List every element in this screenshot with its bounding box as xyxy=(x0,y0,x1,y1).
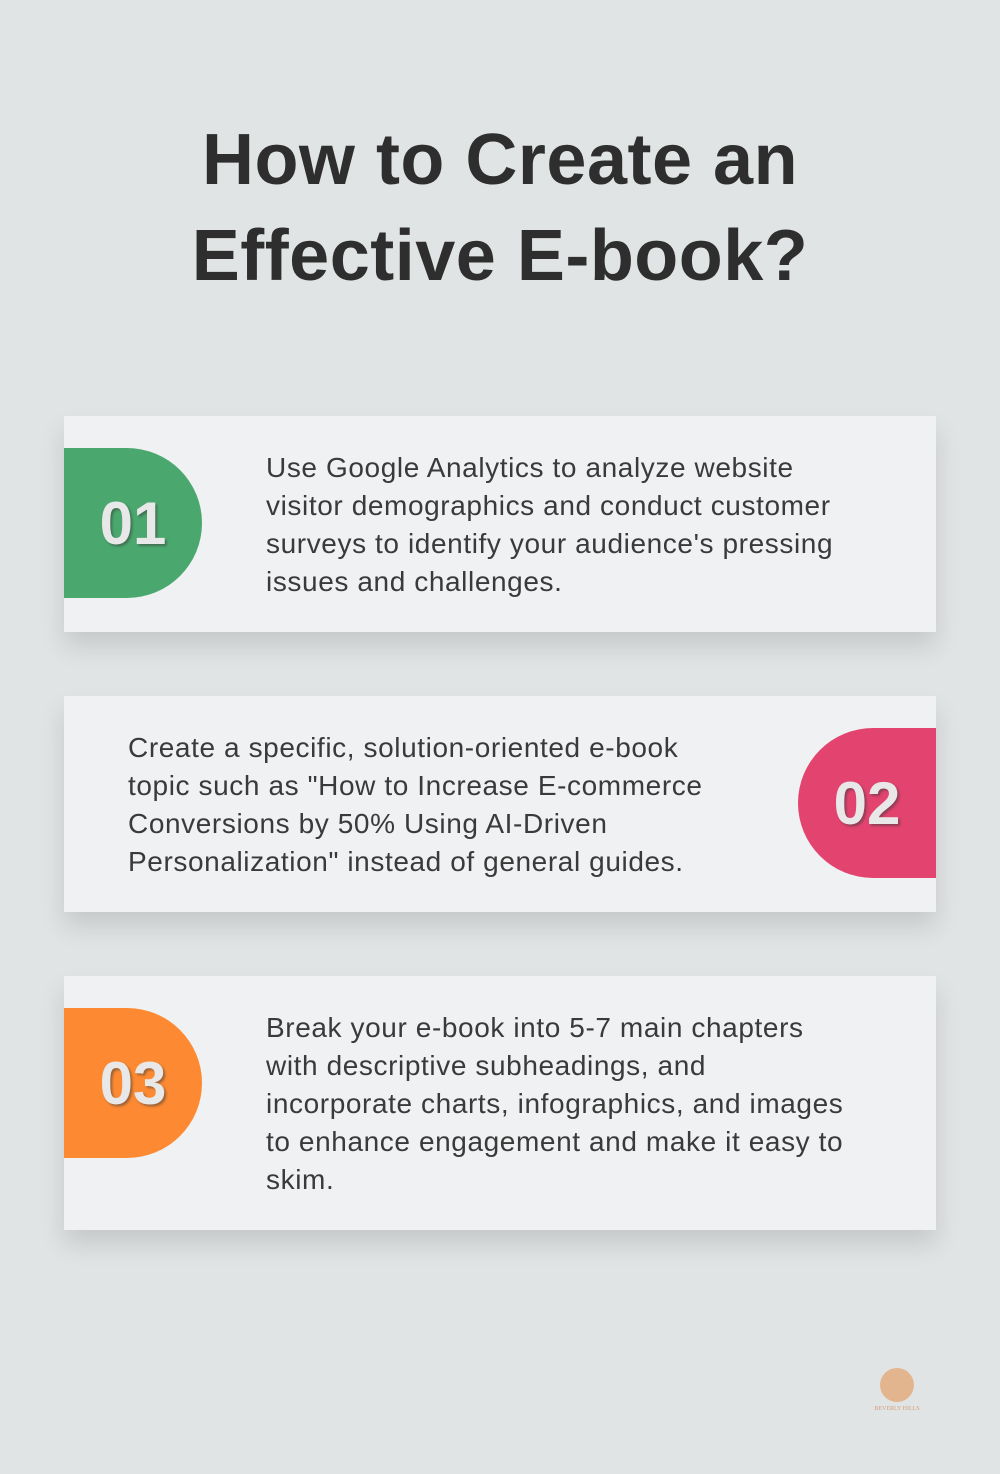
text step 2: Personalization" instead of general guides. xyxy=(128,846,684,877)
panel: step 3 xyxy=(64,976,936,1230)
badge 02: 02 xyxy=(834,770,900,836)
text step 2: Conversions by 50% Using AI-Driven xyxy=(128,808,608,839)
text step 1: surveys to identify your audience's pressing xyxy=(266,528,833,559)
logo text: BEVERLY HILLS xyxy=(874,1406,920,1412)
text step 2 xyxy=(128,732,703,877)
text step 3: incorporate charts, infographics, and images xyxy=(266,1088,843,1119)
logo xyxy=(874,1368,920,1412)
title: How to Create an xyxy=(202,120,798,200)
badge 01: 01 xyxy=(100,490,166,556)
badge 01 xyxy=(64,448,202,598)
text step 3: skim. xyxy=(266,1164,334,1195)
text step 1: Use Google Analytics to analyze website xyxy=(266,452,794,483)
text step 3: Break your e-book into 5-7 main chapters xyxy=(266,1012,804,1043)
icon: logo circle xyxy=(880,1368,914,1402)
text step 3: to enhance engagement and make it easy to xyxy=(266,1126,843,1157)
text step 2: topic such as "How to Increase E-commerce xyxy=(128,770,703,801)
badge 03 xyxy=(64,1008,202,1158)
title: Effective E-book? xyxy=(192,216,808,296)
badge 03: 03 xyxy=(100,1050,166,1116)
text step 1: issues and challenges. xyxy=(266,566,562,597)
panel: step 1 xyxy=(64,416,936,632)
text step 1 xyxy=(266,452,833,597)
text step 1: visitor demographics and conduct customer xyxy=(266,490,831,521)
panel: step 2 xyxy=(64,696,936,912)
text step 2: Create a specific, solution-oriented e-book xyxy=(128,732,678,763)
title xyxy=(192,120,808,296)
badge 02 xyxy=(798,728,936,878)
text step 3 xyxy=(266,1012,843,1195)
text step 3: with descriptive subheadings, and xyxy=(266,1050,706,1081)
